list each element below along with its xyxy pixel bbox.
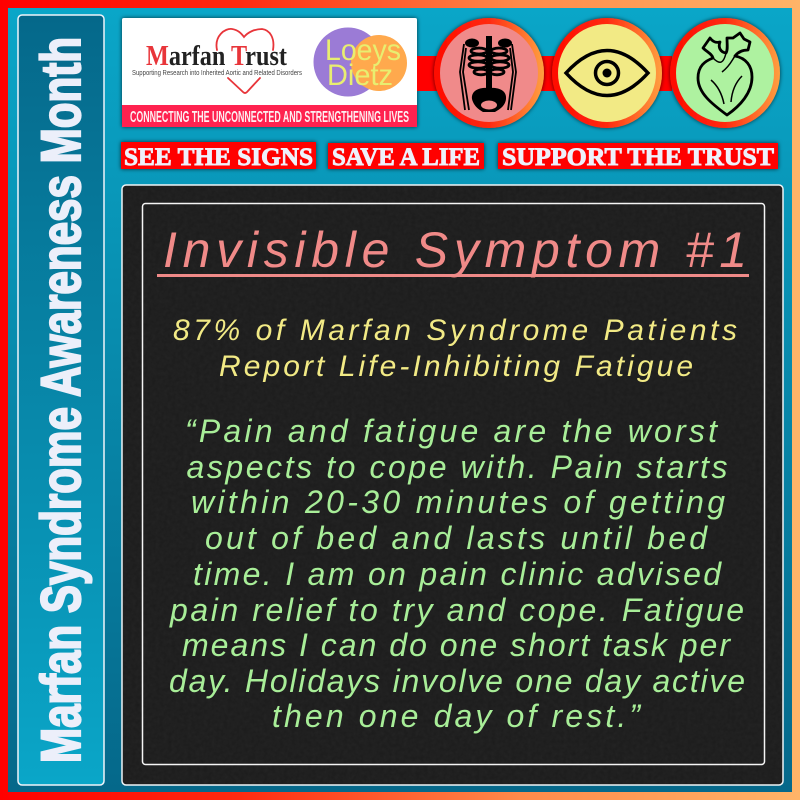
quote: “Pain and fatigue are the worst	[185, 413, 718, 449]
logo: Loeys Dietz: Loeys	[325, 34, 401, 67]
icon: eye badge	[552, 18, 662, 128]
quote: out of bed and lasts until bed	[205, 520, 708, 556]
heading underline	[157, 274, 749, 277]
subheading: Report Life-Inhibiting Fatigue	[219, 350, 693, 383]
quote: means I can do one short task per	[182, 627, 731, 663]
quote: then one day of rest.”	[272, 698, 641, 734]
logo subtitle: Supporting Research into Inherited Aortic and Related Disorders	[132, 70, 302, 77]
logo strip	[122, 105, 417, 127]
logo strip text: CONNECTING THE UNCONNECTED AND STRENGTHENING LIVES	[130, 109, 409, 126]
subheading: 87% of Marfan Syndrome Patients	[173, 314, 737, 347]
heading: Invisible Symptom #1	[163, 222, 747, 278]
pelvis	[472, 88, 506, 112]
chalk texture	[123, 186, 782, 784]
red connecting bar	[417, 56, 672, 91]
icon: heart badge	[670, 18, 780, 128]
panel: chalkboard	[122, 185, 783, 785]
chalkboard inner frame	[142, 204, 764, 764]
logo: Loeys Dietz	[314, 28, 407, 96]
tag: save a life: SAVE A LIFE	[332, 144, 480, 171]
logo text: Marfan Trust: Marfan Trust	[146, 40, 287, 72]
spine	[486, 36, 492, 94]
quote: time. I am on pain clinic advised	[193, 556, 722, 592]
logo: Loeys Dietz: Dietz	[327, 59, 393, 92]
ribs	[469, 48, 509, 75]
subheading	[173, 314, 737, 383]
icon: skeleton badge	[434, 18, 544, 128]
tag: support the trust: SUPPORT THE TRUST	[502, 144, 774, 171]
quote: aspects to cope with. Pain starts	[186, 449, 728, 485]
logo panel	[122, 18, 417, 127]
tag: see the signs: SEE THE SIGNS	[124, 144, 313, 171]
quote: within 20-30 minutes of getting	[191, 484, 725, 520]
arms	[460, 44, 516, 110]
icon: heart outline	[216, 29, 273, 93]
quote: day. Holidays involve one day active	[169, 663, 745, 699]
shoulders	[465, 38, 479, 48]
quote: pain relief to try and cope. Fatigue	[169, 592, 744, 628]
panel: vertical title	[18, 15, 104, 785]
quote	[169, 413, 745, 734]
